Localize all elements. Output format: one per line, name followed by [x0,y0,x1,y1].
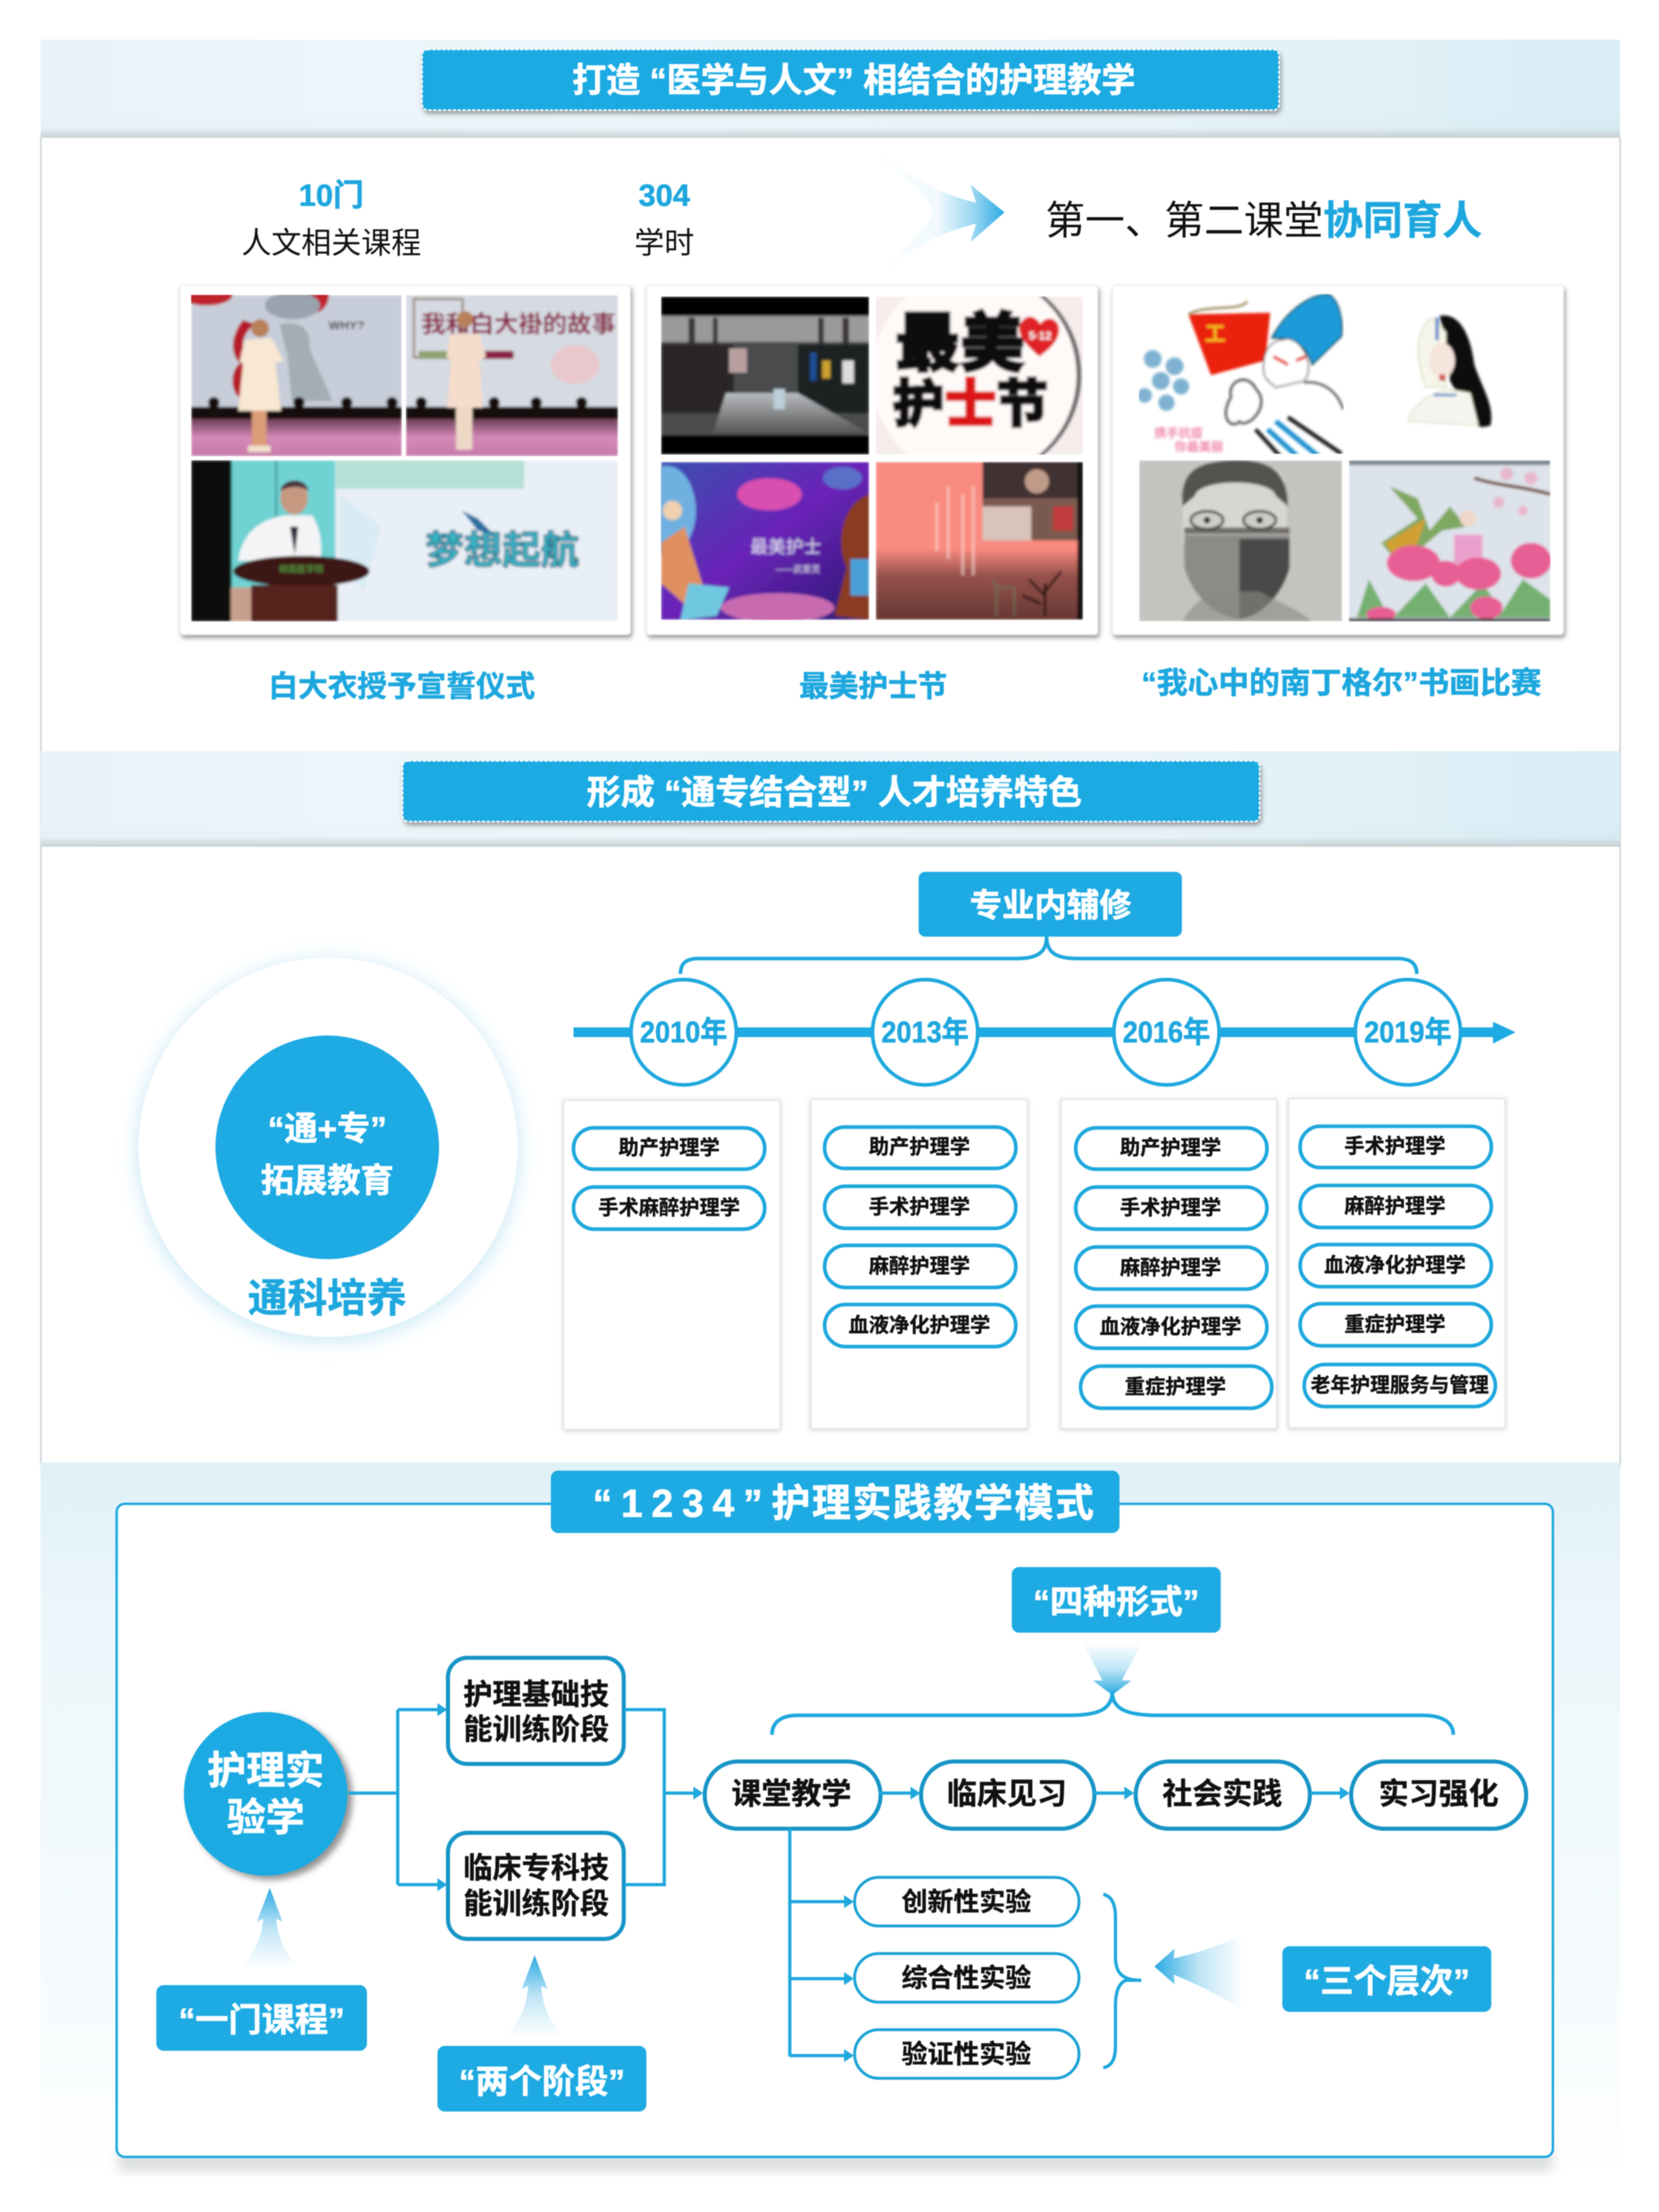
pill: social practice: 社会实践 [1162,1778,1282,1810]
course pill [574,1128,765,1169]
course pill [1081,1366,1272,1408]
heading 2: 形成 “通专结合型” 人才培养特色 [586,773,1082,812]
shadow under frame [118,2147,1552,2171]
arrow [879,1787,920,1800]
course pill [1076,1247,1267,1289]
pill: verification experiment: 验证性实验 [902,2039,1031,2069]
callout: two stages [437,2046,646,2112]
pill: internship: 实习强化 [1379,1778,1499,1810]
course pill [1076,1187,1267,1229]
panel: photo card nurses day [638,271,1098,634]
photo: nurse cartoon on galaxy: ——武爱灵 [776,564,820,574]
drawing: watercolor of map and lotus flowers [1348,460,1551,622]
callout: one course [156,1985,367,2051]
box: specialist skills stage [448,1833,624,1939]
timeline node 2019: 2019年 [1364,1016,1452,1048]
course pill [825,1305,1016,1347]
bracket: three levels [1103,1894,1141,2068]
course pill [1300,1126,1491,1168]
course pill: 麻醉护理学 [1120,1257,1222,1279]
column 2013 [811,1100,1027,1428]
course pill [1076,1128,1267,1169]
panel: humanities nursing teaching [41,40,1620,703]
pill: clinical observation [921,1761,1094,1829]
stat: 10 courses: 人文相关课程 [241,227,421,259]
bracket: four forms [772,1692,1453,1735]
box: basic skills stage [448,1658,624,1764]
timeline arrow [574,1022,1516,1044]
photo: podium speaker [190,459,618,622]
course pill [1300,1185,1491,1228]
pill: innovative experiment: 创新性实验 [902,1887,1031,1916]
course pill [825,1127,1016,1168]
box: basic skills stage: 护理基础技 [463,1677,609,1711]
connector: classroom to experiments [790,1829,854,2062]
stat: 10 courses [241,179,421,259]
course pill [825,1245,1016,1287]
course pill [574,1187,765,1229]
label: tong plus zhuan: “通+专” [268,1110,386,1147]
photo: nurses day calligraphy: 护士节 [893,375,1048,433]
course pill: 血液净化护理学 [1099,1316,1242,1339]
box: basic skills stage: 能训练阶段 [463,1713,609,1745]
course pill [1300,1304,1491,1346]
photo: stage speaker right [405,295,619,457]
pill: internship [1351,1761,1526,1829]
course pill: 重症护理学 [1124,1376,1226,1399]
column 2010 [564,1100,780,1429]
photo: empty street [660,296,870,455]
main frame box [117,1504,1553,2157]
course pill: 手术护理学 [1120,1197,1222,1219]
drawing: nurse with party flag: 携手抗疫 [1154,426,1203,441]
section frame: side borders [41,138,1620,1467]
icon: arrow left fade [1154,1933,1243,2011]
photo: nurses day calligraphy [876,296,1084,455]
course pill [825,1186,1016,1228]
timeline node 2019 [1355,980,1461,1085]
drawing: nurse with party flag: 你最美丽 [1175,439,1223,454]
connector: circle to stages [348,1703,447,1891]
course pill: 重症护理学 [1344,1313,1446,1336]
drawing: nurse in protective suit [1406,313,1494,429]
caption: white coat ceremony: 白大衣授予宣誓仪式 [268,669,535,703]
section background [41,1463,1620,2176]
heading 1 [422,49,1279,110]
drawing: nurse with party flag: 工 [1205,322,1226,346]
box: specialist skills stage: 临床专科技 [463,1851,609,1885]
course pill: 老年护理服务与管理 [1311,1374,1489,1397]
course pill: 手术护理学 [868,1196,970,1219]
photo: stage speaker left [190,294,403,457]
photo: nurses day calligraphy: 最美 [895,308,1025,379]
timeline node 2010: 2010年 [640,1016,727,1048]
panel: general plus specialist training [41,751,1620,1429]
heading 3: “1234”护理实践教学模式 [593,1483,1095,1525]
photo: nurses day calligraphy: 5·12 [1029,329,1051,342]
pill: classroom teaching [705,1761,881,1829]
stat: 10 courses: 10门 [299,179,364,213]
pill: comprehensive experiment [855,1954,1079,2002]
drawing: nurse with party flag [1138,293,1345,455]
pill: social practice [1136,1761,1310,1829]
stat: 304 hours: 学时 [634,227,694,259]
timeline node 2016 [1114,980,1219,1085]
course pill: 手术护理学 [1344,1135,1446,1158]
icon: gradient arrow [872,151,1004,280]
course pill: 血液净化护理学 [848,1314,991,1337]
callout: three levels [1282,1946,1491,2012]
photo: stage speaker left: WHY? [329,319,365,332]
caption: nurses day: 最美护士节 [800,669,947,703]
icon: arrow up fade two [505,1955,565,2036]
pill: clinical observation: 临床见习 [947,1778,1067,1810]
course pill: 助产护理学 [618,1137,720,1159]
column 2016 [1061,1100,1277,1428]
panel: 1234 nursing practice model [41,1463,1620,2176]
course pill: 助产护理学 [868,1136,970,1159]
timeline node 2016: 2016年 [1123,1016,1210,1048]
course pill: 手术麻醉护理学 [598,1197,740,1219]
stat: 304 hours: 304 [638,179,690,213]
timeline node 2010 [631,980,736,1085]
panel: photo card nightingale painting contest [1112,285,1563,634]
diagram: general education circle [126,948,531,1353]
column 2019 [1289,1099,1505,1428]
course pill [1076,1306,1267,1348]
pill: verification experiment [855,2030,1079,2078]
label: extended education: 拓展教育 [261,1162,394,1199]
arrow [1311,1787,1350,1800]
heading 3 [551,1471,1120,1533]
heading 1: 打造 “医学与人文” 相结合的护理教学 [572,62,1136,99]
bracket: years grouping [680,937,1417,974]
box: specialist skills stage: 能训练阶段 [463,1886,609,1920]
heading 2 [403,761,1260,822]
course pill: 助产护理学 [1120,1137,1222,1159]
photo: podium speaker: 皖南医学院 [279,563,324,574]
callout: one course: “一门课程” [178,2001,345,2039]
callout: three levels: “三个层次” [1304,1962,1469,2000]
icon: arrow down fade [1083,1643,1141,1695]
course pill [1300,1245,1491,1287]
connector: stages to classroom [625,1710,703,1885]
course pill [1304,1364,1495,1407]
callout: four forms [1012,1567,1221,1633]
icon: arrow up fade one [240,1888,300,1967]
label: general training: 通科培养 [248,1277,407,1321]
timeline node 2013 [872,980,978,1085]
caption: painting contest: “我心中的南丁格尔”书画比赛 [1141,666,1542,700]
photo: nurse cartoon on galaxy [660,461,870,621]
badge: minor within major: 专业内辅修 [970,888,1132,924]
photo: salmon poster with classroom [875,461,1084,621]
panel: photo card white coat ceremony [180,277,630,634]
pill: innovative experiment [855,1877,1079,1926]
photo: podium speaker: 梦想起航 [425,530,579,572]
stat: 304 hours [634,179,694,259]
badge: minor within major [919,872,1182,937]
arrow [1094,1787,1134,1800]
pill: classroom teaching: 课堂教学 [731,1778,851,1810]
photo: nurse cartoon on galaxy: 最美护士 [750,536,821,557]
course pill: 麻醉护理学 [868,1255,970,1278]
callout: first and second classrooms: 第一、第二课堂协同育人 [1045,199,1482,243]
callout: two stages: “两个阶段” [458,2063,625,2100]
course pill: 麻醉护理学 [1344,1195,1446,1218]
node: practice course circle [184,1712,348,1876]
node: practice course circle: 验学 [227,1797,305,1839]
node: practice course circle: 护理实 [207,1750,324,1792]
drawing: pencil sketch of masked doctor [1139,460,1343,622]
header band 1 [41,40,1620,138]
pill: comprehensive experiment: 综合性实验 [902,1963,1031,1992]
header band 2 [41,751,1620,847]
course pill: 血液净化护理学 [1324,1254,1466,1277]
photo: stage speaker right: 我和白大褂的故事 [421,311,616,338]
timeline node 2013: 2013年 [881,1016,969,1048]
callout: four forms: “四种形式” [1034,1583,1199,1621]
